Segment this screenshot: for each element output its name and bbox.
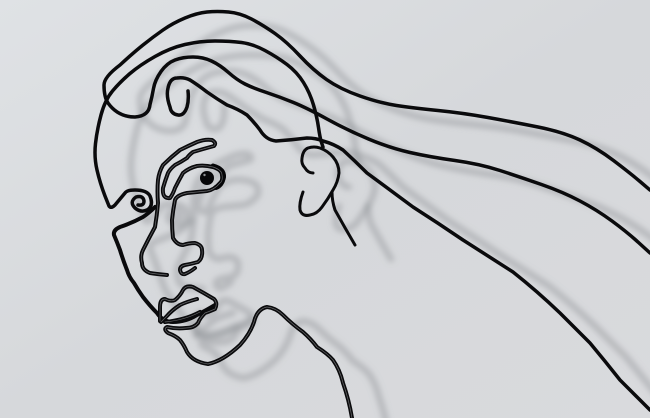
wire highlights on the face (141, 140, 352, 418)
wire: eyebrow and nose (141, 140, 222, 275)
icon: eye pupil with thick ring (200, 166, 224, 188)
wire: skull line ending in the brow spiral (95, 41, 323, 211)
wire: inner curl and lower hair strand (167, 78, 650, 410)
wire: lips, chin and neck (160, 286, 352, 418)
wire: ear and neck back (300, 147, 355, 245)
wire: outer hair strand looping over the forehead (104, 12, 650, 253)
wire: cheek and jaw line (114, 207, 215, 322)
blurred wall shadow of the sculpture (131, 26, 650, 418)
